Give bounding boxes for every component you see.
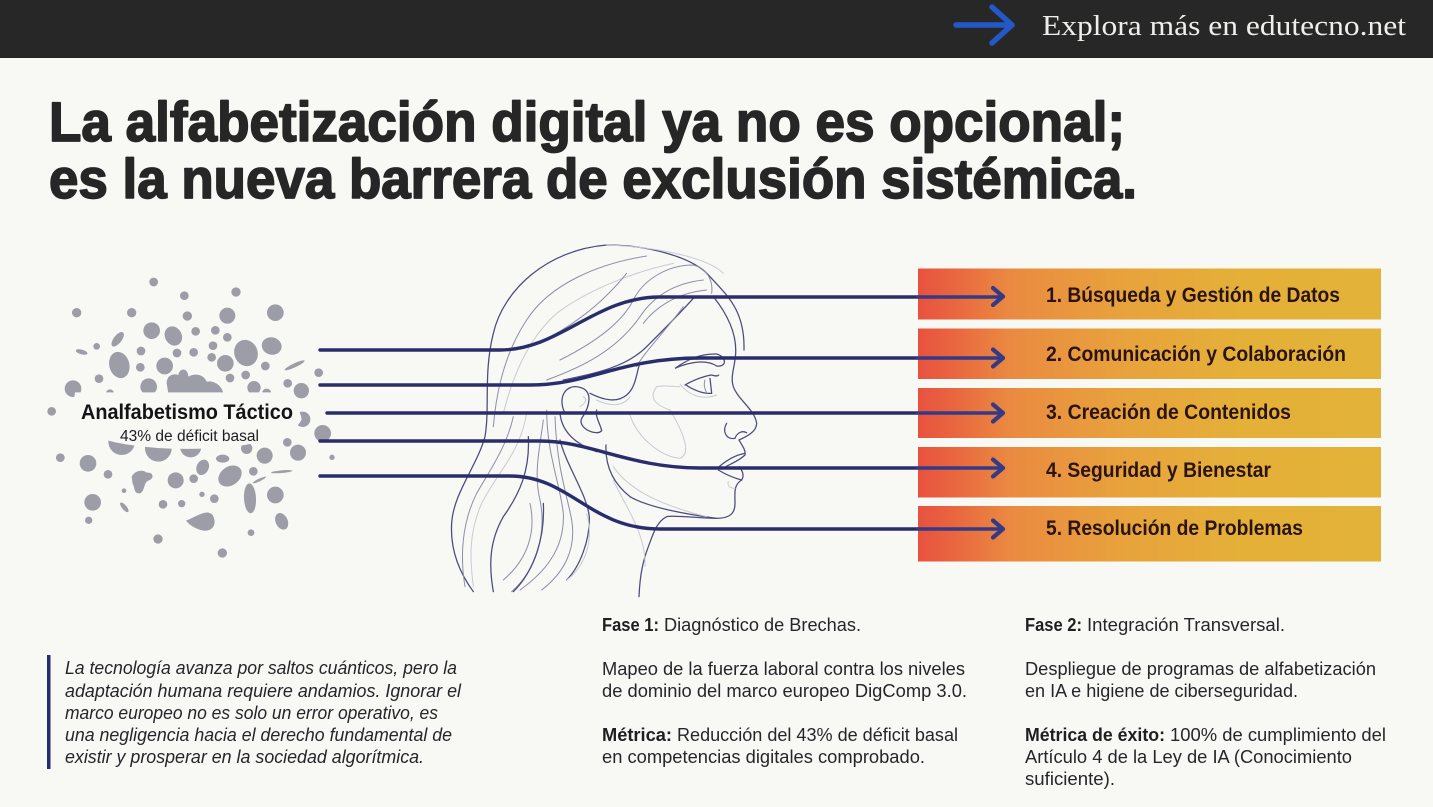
phase 2 text: suficiente). — [1025, 769, 1115, 789]
phase 2 text: 100% de cumplimiento del — [1170, 725, 1386, 745]
phase 1 text: de dominio del marco europeo DigComp 3.0. — [602, 681, 967, 701]
phase 1 text: en competencias digitales comprobado. — [602, 747, 925, 767]
phase 2 text: Integración Transversal. — [1087, 615, 1285, 635]
header link text: Explora más en edutecno.net — [1042, 10, 1406, 42]
competency bar 3 — [918, 388, 1381, 438]
title: La alfabetización digital ya no es opcional; — [49, 90, 1125, 153]
nose — [725, 423, 747, 439]
phase 1 text: Mapeo de la fuerza laboral contra los niveles — [602, 659, 965, 679]
particle cloud: analfabetismo táctico — [47, 278, 335, 558]
label: déficit basal: 43% de déficit basal — [120, 428, 259, 445]
long hair strands — [462, 417, 513, 587]
competency bar 2 — [918, 328, 1381, 379]
competency bar 2: 2. Comunicación y Colaboración — [1046, 343, 1346, 366]
quote block: marco europeo no es solo un error operativo, es — [65, 703, 438, 723]
title — [49, 90, 1137, 210]
phase 1 text: Diagnóstico de Brechas. — [664, 615, 861, 635]
flow line 4 — [320, 441, 1003, 476]
quote block — [47, 655, 462, 769]
phase 2 text: en IA e higiene de ciberseguridad. — [1025, 681, 1298, 701]
label backing — [72, 392, 302, 449]
phase 2 text: Fase 2: — [1025, 615, 1082, 635]
quote block: adaptación humana requiere andamios. Ignorar el — [65, 681, 462, 701]
ear — [562, 387, 602, 433]
quote block: una negligencia hacia el derecho fundamental de — [65, 725, 452, 745]
icon: blue arrow — [956, 7, 1012, 43]
eye and brow — [685, 375, 719, 385]
phase 2 text: Artículo 4 de la Ley de IA (Conocimiento — [1025, 747, 1352, 767]
competency bar 4 — [918, 447, 1381, 498]
phase 1 text: Reducción del 43% de déficit basal — [677, 725, 958, 745]
flow line 3 — [327, 404, 1003, 422]
phase 2 text: Métrica de éxito: — [1025, 725, 1165, 745]
flow line 2 — [320, 350, 1003, 385]
lips — [718, 453, 745, 467]
phase 2 text: Despliegue de programas de alfabetización — [1025, 659, 1376, 679]
cheek — [630, 386, 686, 458]
competency bar 1: 1. Búsqueda y Gestión de Datos — [1046, 284, 1340, 307]
header bar — [0, 0, 1433, 58]
competency bar 5 — [918, 506, 1381, 562]
phase 1 text: Métrica: — [602, 725, 672, 745]
quote block: existir y prosperar en la sociedad algorítmica. — [65, 747, 424, 767]
competency bar 1 — [918, 268, 1381, 320]
label: Analfabetismo Táctico: Analfabetismo Táctico — [81, 401, 293, 424]
hair outline — [451, 245, 744, 592]
flow line 1 — [320, 288, 1003, 350]
phase 1 text: Fase 1: — [602, 615, 659, 635]
title: es la nueva barrera de exclusión sistémica. — [49, 147, 1137, 210]
flow line 5 — [320, 476, 1003, 538]
competency bar 4: 4. Seguridad y Bienestar — [1046, 459, 1271, 482]
jaw — [606, 445, 717, 518]
head line drawing — [451, 245, 757, 597]
quote block: La tecnología avanza por saltos cuánticos, pero la — [65, 658, 457, 678]
competency bar 3: 3. Creación de Contenidos — [1046, 401, 1291, 424]
phase 2 text — [1025, 615, 1386, 789]
phase 1 text — [602, 615, 967, 767]
face profile — [713, 297, 757, 467]
competency bar 5: 5. Resolución de Problemas — [1046, 517, 1303, 540]
